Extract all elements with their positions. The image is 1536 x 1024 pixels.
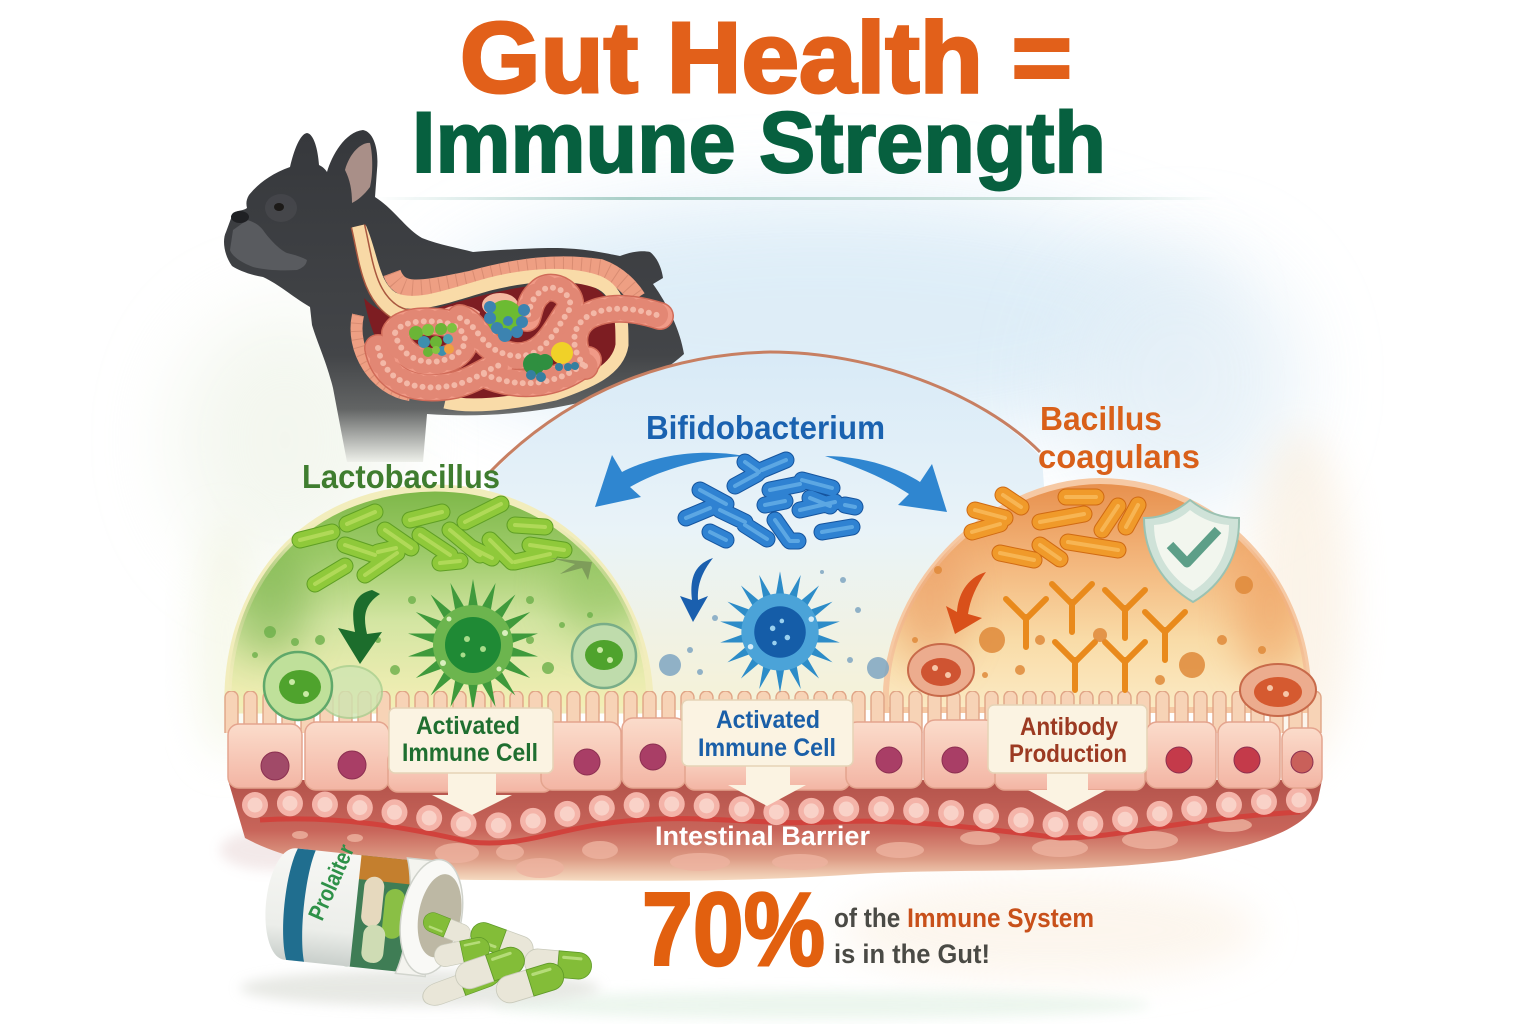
- background watercolor wash: [175, 200, 1350, 1019]
- orange dots: [912, 566, 1266, 685]
- shield icon: [1144, 500, 1239, 602]
- stomach: [432, 305, 480, 330]
- orange bacteria: [972, 495, 1138, 560]
- arrow: green down: [338, 590, 382, 664]
- arrow: blue left: [595, 453, 745, 507]
- round immune cell right: [572, 624, 636, 688]
- capsule g: [420, 910, 474, 946]
- upper villi strip: [392, 265, 637, 298]
- blue dust particles: [659, 570, 889, 679]
- capsule c: [493, 960, 567, 1006]
- callout: antibody production: Antibody: [1020, 713, 1118, 741]
- bottle shadow: [240, 970, 600, 1006]
- callout: antibody production: [988, 705, 1147, 811]
- barrier tissue band: [228, 780, 1322, 881]
- capsule a: [419, 961, 505, 1009]
- body cavity: [364, 283, 622, 402]
- callout: activated immune cell blue: Activated: [716, 706, 820, 734]
- big number: 70%: [642, 872, 825, 988]
- blue bacteria: [686, 460, 855, 541]
- title line: Immune Strength: Immune Strength: [412, 95, 1106, 191]
- arrow: blue down: [680, 558, 713, 622]
- gut lining band: [360, 228, 622, 405]
- capsule e: [467, 919, 537, 965]
- nuclei: [261, 744, 1313, 780]
- bottle label text: Prolaiter: [303, 840, 359, 924]
- epithelial cells: [228, 718, 1322, 792]
- dog with gut cutaway: [224, 130, 684, 462]
- panel: bifidobacterium: [595, 409, 947, 700]
- intestinal barrier: [220, 718, 1322, 881]
- activated immune cell: green: [392, 571, 554, 719]
- callout: activated immune cell blue: [682, 700, 853, 806]
- title line: Gut Health =: Gut Health =: [460, 2, 1072, 114]
- ear inner: [345, 143, 372, 203]
- capsule f: [432, 935, 492, 969]
- callout: antibody production: Production: [1009, 740, 1127, 768]
- left tissue smudge: [220, 830, 320, 870]
- statistic line 2: is in the Gut!: [834, 939, 990, 969]
- lower pale tissue spots: [292, 818, 1252, 878]
- statistic: 70% of the immune system is in the gut: [642, 872, 1094, 988]
- lower left villi strip: [357, 315, 410, 395]
- dog muzzle: [230, 220, 307, 270]
- green bacteria: [300, 504, 564, 584]
- arrow: orange down: [946, 572, 986, 634]
- label: Intestinal Barrier: Intestinal Barrier: [655, 821, 870, 851]
- capsules inside jar: [344, 855, 425, 973]
- yellow microbe cluster: [523, 342, 579, 382]
- callout: activated immune cell blue: Immune Cell: [698, 734, 836, 762]
- label: coagulans: coagulans: [1038, 438, 1200, 475]
- small pale arrow: [550, 558, 592, 580]
- round immune cell left: [908, 644, 974, 696]
- dog silhouette: [224, 130, 684, 462]
- label: Bacillus: Bacillus: [1040, 400, 1162, 437]
- arch with sky: [480, 352, 1060, 710]
- dog eye: [274, 203, 284, 211]
- bottle blue band: [279, 848, 316, 962]
- capsule group: [419, 910, 593, 1009]
- label: Bifidobacterium: Bifidobacterium: [646, 409, 885, 446]
- villi row: [222, 691, 1322, 733]
- label: Lactobacillus: Lactobacillus: [302, 458, 500, 495]
- eye patch shade: [265, 194, 297, 222]
- panel: bacillus coagulans: [908, 400, 1316, 716]
- arrow: blue right: [825, 456, 947, 512]
- callout: activated immune cell green: Activated: [416, 712, 520, 740]
- bottle opening: [392, 855, 471, 979]
- esophagus tube: [358, 226, 440, 319]
- bottle body: [260, 846, 361, 967]
- callout: activated immune cell green: Immune Cell: [402, 739, 538, 767]
- capsule b: [452, 943, 528, 993]
- capsule d: [523, 948, 593, 980]
- red basement line: [260, 812, 1300, 843]
- callout: activated immune cell green: [389, 708, 553, 815]
- green dots: [252, 596, 593, 675]
- antibodies: [1006, 584, 1185, 690]
- intestines: [378, 288, 660, 387]
- dome: bacillus coagulans: [886, 481, 1308, 710]
- pill bottle: [240, 840, 600, 1009]
- round immune cell left: [264, 652, 382, 720]
- activated immune cell: blue: [706, 564, 854, 700]
- opening interior: [412, 871, 468, 961]
- green microbe cluster: [409, 323, 457, 357]
- dome: lactobacillus: [228, 488, 650, 710]
- round immune cell right: [1240, 664, 1316, 716]
- cell blobs row: [255, 800, 1300, 826]
- blue and green microbe cluster: [484, 300, 530, 342]
- dog nose: [231, 211, 249, 223]
- panel: lactobacillus: [252, 504, 636, 720]
- bottle neck: [395, 858, 437, 977]
- tipped bottle: [260, 840, 471, 980]
- statistic line 1: of the Immune System: [834, 903, 1094, 933]
- title: [412, 2, 1106, 191]
